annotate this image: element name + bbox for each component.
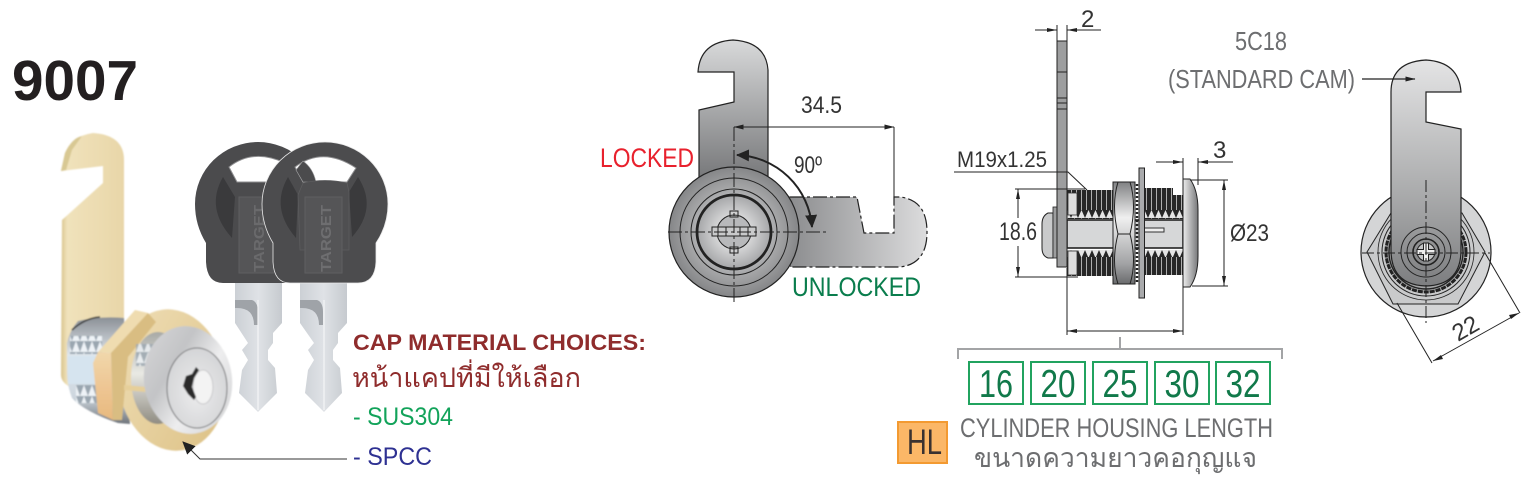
key nose — [1042, 213, 1053, 258]
rear key blade — [235, 283, 282, 412]
cam plate — [61, 133, 124, 400]
cam edge — [1057, 41, 1067, 267]
length options — [969, 362, 1270, 406]
option 32: 32 — [1226, 363, 1260, 406]
drawing: locked / unlocked front view — [600, 40, 927, 303]
washer — [109, 302, 235, 458]
label diameter: Ø23 — [1230, 220, 1269, 247]
washer — [1139, 168, 1144, 298]
HL badge: HL — [907, 423, 942, 462]
thread leader — [954, 172, 1087, 190]
front key head — [262, 142, 388, 283]
hex nut — [1113, 182, 1135, 284]
cap — [1183, 179, 1198, 287]
option sus304: - SUS304 — [353, 403, 453, 431]
label unlocked: UNLOCKED — [792, 272, 921, 302]
drawing: rear view — [1361, 60, 1520, 363]
label thread: M19x1.25 — [957, 147, 1047, 172]
threaded barrel — [1067, 190, 1113, 212]
cap heading thai: หน้าแคปที่มีให้เลือก — [352, 359, 581, 393]
photo: brass cam lock — [61, 133, 239, 458]
threaded barrel — [67, 317, 130, 424]
dimension 2 — [1035, 25, 1101, 41]
key face — [167, 348, 227, 428]
label 22: 22 — [1448, 310, 1484, 347]
cylinder rings — [669, 167, 799, 297]
cam — [1391, 60, 1461, 286]
hex nut — [98, 310, 148, 357]
silver cap — [137, 320, 239, 440]
front thread — [131, 332, 185, 424]
rear key head — [195, 142, 321, 283]
hex nut — [1367, 213, 1485, 304]
front key brand: TARGET — [318, 205, 335, 272]
photo: front key — [262, 142, 388, 412]
front key blade — [300, 283, 347, 412]
leader line to cap — [183, 442, 347, 459]
label 18.6: 18.6 — [999, 218, 1037, 246]
dimension 22 — [1397, 253, 1520, 363]
dimension 3 — [1156, 158, 1233, 185]
dimension diameter — [1190, 180, 1228, 286]
label 2: 2 — [1081, 6, 1094, 33]
label: standard cam — [1168, 26, 1355, 94]
housing length bracket — [958, 337, 1282, 359]
key slot — [712, 211, 756, 253]
photo: rear key — [195, 142, 321, 412]
rear key brand: TARGET — [251, 205, 268, 272]
flange circle — [1361, 187, 1491, 317]
keyway — [183, 367, 199, 400]
option spcc: - SPCC — [353, 443, 432, 471]
dimension housing length — [1067, 268, 1183, 335]
cap material block — [352, 330, 646, 471]
locked cam — [698, 40, 768, 190]
dimension 18.6 — [1015, 189, 1085, 277]
unlocked cam dashed — [790, 197, 927, 267]
label: standard cam: 5C18 — [1235, 26, 1287, 56]
label locked: LOCKED — [600, 143, 694, 173]
thread rings — [1378, 204, 1474, 300]
rotation arrow — [737, 155, 812, 227]
label 90 degrees: 90º — [794, 152, 822, 179]
label 34.5: 34.5 — [801, 92, 842, 119]
key cylinder — [1401, 227, 1451, 277]
title: model 9007: 9007 — [12, 49, 138, 113]
cap heading: CAP MATERIAL CHOICES: — [353, 330, 646, 355]
center lines — [1362, 180, 1490, 323]
arrow to cam — [1362, 78, 1415, 80]
center lines — [668, 127, 826, 303]
label 3: 3 — [1213, 137, 1226, 164]
caption: cylinder housing length: CYLINDER HOUSING LENGTH — [960, 413, 1273, 443]
option 20: 20 — [1040, 363, 1076, 406]
option 25: 25 — [1102, 363, 1138, 406]
drawing: side view — [954, 6, 1269, 335]
caption thai: ขนาดความยาวคอกุญแจ — [974, 443, 1257, 475]
option 16: 16 — [979, 363, 1013, 406]
label: standard cam: (STANDARD CAM) — [1168, 64, 1355, 94]
dimension 34.5 — [734, 126, 894, 128]
option 30: 30 — [1164, 363, 1200, 406]
